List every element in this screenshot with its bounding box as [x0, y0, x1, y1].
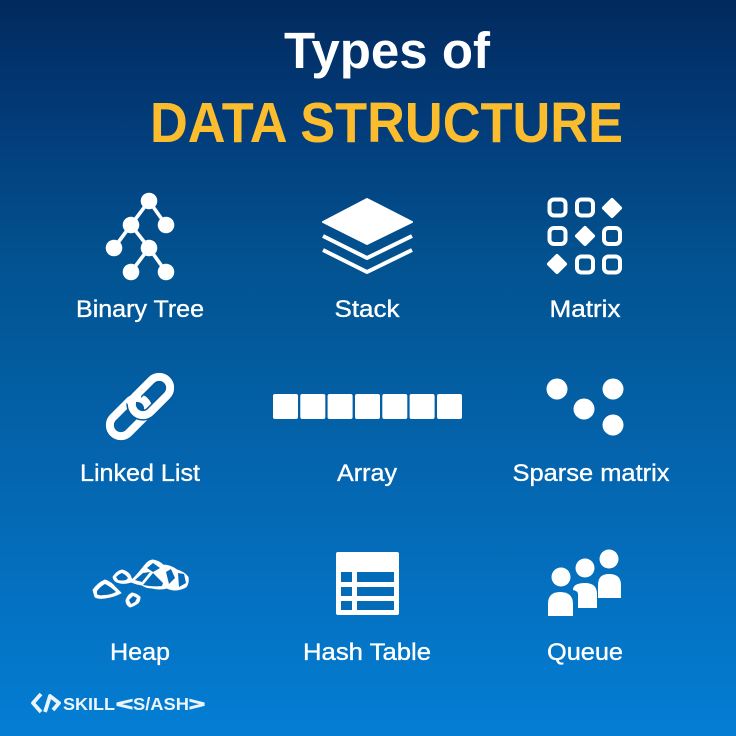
label: Array: Array: [337, 460, 397, 487]
panel: heap: [93, 560, 188, 666]
label: Linked List: Linked List: [80, 460, 200, 487]
label: Matrix: Matrix: [550, 296, 620, 323]
panel: binary tree: [76, 193, 204, 323]
icon: binary tree: [106, 193, 174, 280]
panel: stack: [323, 199, 412, 323]
icon: chain link: [105, 372, 175, 441]
icon: people in queue: [548, 550, 621, 616]
panel: linked list: [80, 372, 200, 487]
icon: code brackets: [33, 694, 59, 712]
panel: sparse matrix: [512, 378, 670, 487]
label: Queue: Queue: [547, 639, 623, 666]
logo: Skill Slash: [33, 694, 205, 714]
wordmark: <: [116, 694, 133, 714]
wordmark: >: [189, 694, 205, 714]
icon: table: [336, 552, 399, 615]
icon: array cells: [273, 394, 462, 419]
label: Hash Table: Hash Table: [303, 639, 431, 666]
label: Heap: Heap: [110, 639, 170, 666]
wordmark: SKILL: [63, 694, 115, 714]
icon: heap blobs: [93, 560, 188, 607]
label: Binary Tree: Binary Tree: [76, 296, 204, 323]
title line: Types of: Types of: [284, 22, 491, 79]
title: [150, 22, 623, 154]
panel: array: [273, 394, 462, 487]
panel: matrix: [549, 200, 620, 323]
panel: hash table: [303, 552, 431, 666]
panel: queue: [547, 550, 623, 666]
icon: scattered dots: [546, 378, 624, 436]
icon: stack of layers: [323, 199, 412, 272]
label: Sparse matrix: Sparse matrix: [512, 460, 670, 487]
wordmark: S/ASH: [133, 694, 189, 714]
label: Stack: Stack: [334, 296, 401, 323]
wordmark: [63, 694, 205, 714]
icon: matrix grid: [549, 200, 620, 272]
title line: DATA STRUCTURE: DATA STRUCTURE: [150, 91, 623, 154]
